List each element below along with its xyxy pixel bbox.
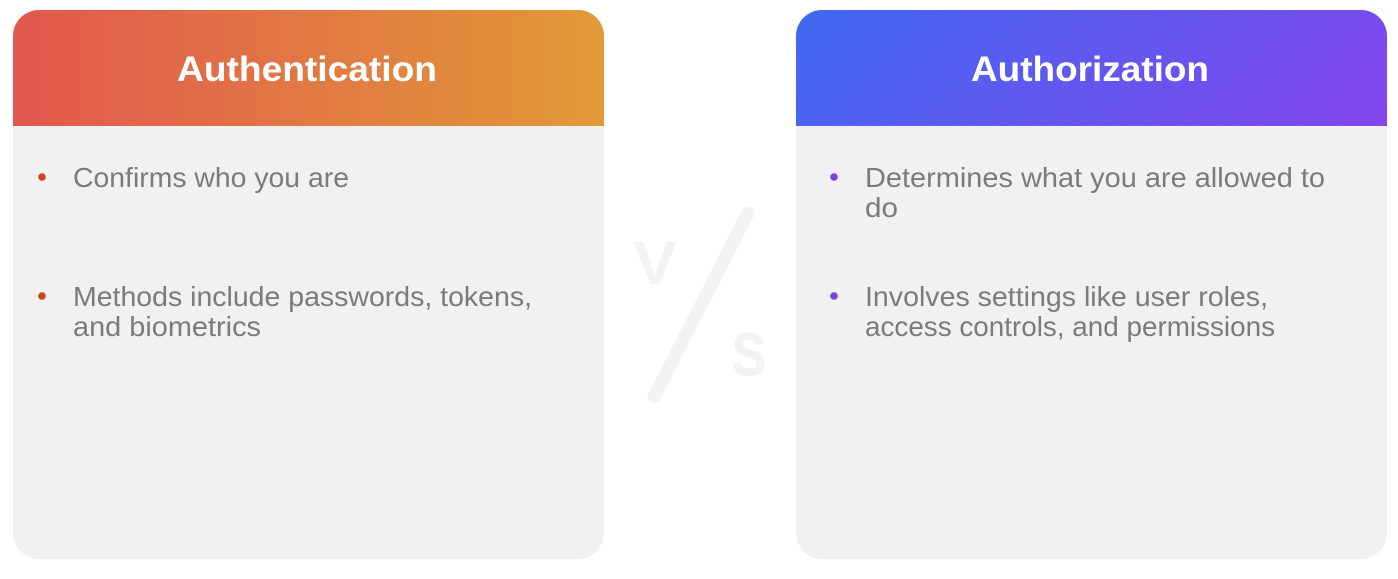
header band [796,10,1387,126]
panel background [13,10,604,559]
text: methods [73,281,532,342]
text: involves: Involves settings like user roles, [865,281,1268,312]
bullet [830,292,838,300]
panel background [796,10,1387,559]
slash [654,213,748,397]
text: determines [865,162,1325,223]
heading: Authorization: Authorization [971,50,1209,89]
text: methods: Methods include passwords, tokens, [73,281,532,312]
letter S: S [732,320,766,388]
text: determines: Determines what you are allowed to [865,162,1325,193]
vs divider [633,213,766,397]
letter V: V [633,230,677,297]
bullet [830,173,838,181]
panel: authorization [796,10,1387,559]
text: involves: access controls, and permissions [865,311,1275,342]
text: confirms who you are: Confirms who you are [73,162,349,193]
text: determines: do [865,192,898,223]
text: involves [865,281,1275,342]
bullet [38,173,46,181]
bullet [38,292,46,300]
heading: Authentication: Authentication [177,50,437,89]
panel: authentication [13,10,604,559]
text: methods: and biometrics [73,311,261,342]
header band [13,10,604,126]
